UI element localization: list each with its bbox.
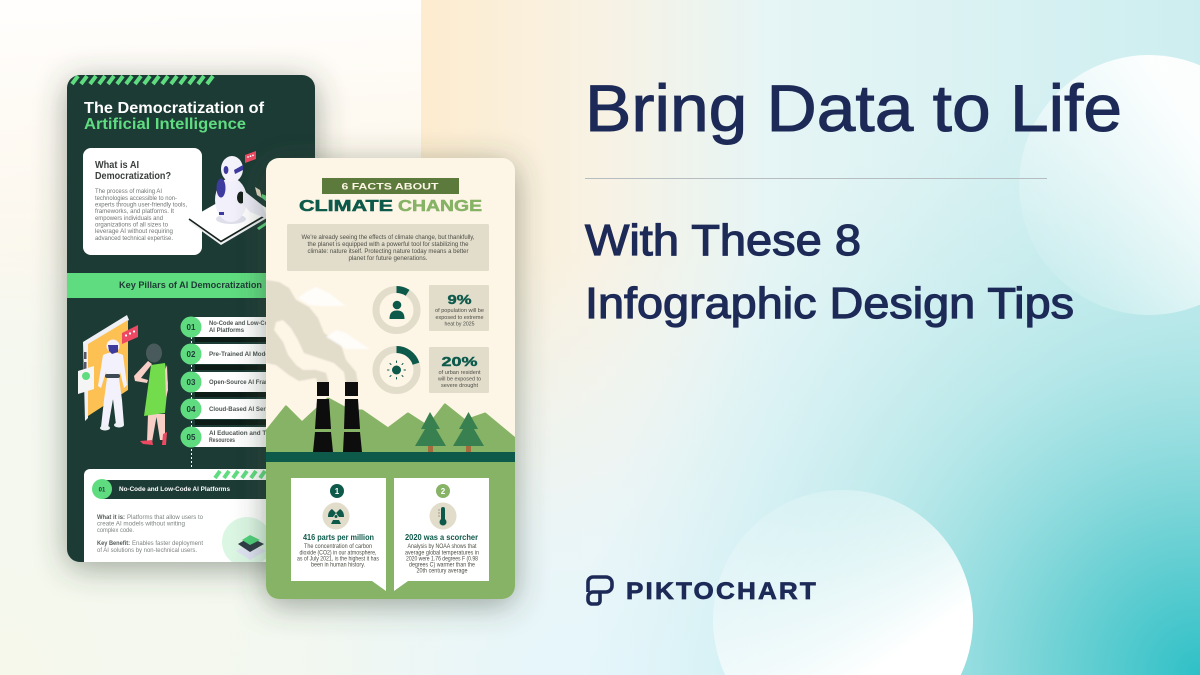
pillars list: No-Code and Low-Code <box>209 321 276 327</box>
key pillars band <box>67 273 266 298</box>
pillars list: 03 <box>187 378 196 387</box>
panel: AI democratization infographic <box>67 75 315 567</box>
dark ground band <box>266 452 515 462</box>
key pillars band: Key Pillars of AI Democratization <box>119 280 262 291</box>
text block: what is AI democratization: The process of making AI <box>95 189 162 195</box>
detail panel: no-code platforms: What it is: <box>97 515 125 521</box>
chart: 9% donut <box>376 290 417 330</box>
detail panel: no-code platforms: 01 <box>99 488 106 494</box>
fact card 2: 20th century average <box>416 569 468 575</box>
text block: what is AI democratization: What is AI <box>95 160 139 171</box>
fact card 1: 416 parts per million <box>303 533 374 542</box>
pillars list: Resources <box>209 438 236 444</box>
fact card 1 <box>291 478 386 591</box>
illustration: chimneys <box>313 382 362 452</box>
stat: 9%: of population will be <box>435 308 484 314</box>
title: Artificial Intelligence <box>84 116 246 133</box>
fact card 1: been in human history. <box>311 563 365 569</box>
text block: what is AI democratization: organizations of all sizes to <box>95 222 169 228</box>
stat: 20%: will be exposed to <box>437 376 481 382</box>
pillars list <box>180 316 266 448</box>
fact card 2: Analysis by NOAA shows that <box>408 544 477 550</box>
text block: what is AI democratization: frameworks, and platforms. It <box>95 209 174 215</box>
detail panel: no-code platforms <box>84 469 266 562</box>
fact card 1: The concentration of carbon <box>304 544 372 550</box>
illustration: smoke <box>266 280 358 384</box>
pillars list: 01 <box>187 323 196 332</box>
heading banner <box>322 178 459 194</box>
heading: bring data to life: Bring Data to Life <box>585 71 1122 145</box>
text block: what is AI democratization: technologies accessible to non- <box>95 196 177 202</box>
pillars list: AI Education and Training <box>209 431 287 437</box>
title: climate change: CLIMATE <box>299 198 393 215</box>
title: climate change: CHANGE <box>398 198 482 215</box>
title <box>84 100 265 133</box>
fact card 2: 2020 was a scorcher <box>405 533 478 542</box>
intro text: planet for future generations. <box>348 255 428 262</box>
text block: what is AI democratization: advanced technical expertise. <box>95 236 173 242</box>
intro text: climate: nature itself. Protecting nature today means a better <box>308 248 468 255</box>
icon: robot on phone <box>189 151 272 245</box>
ground <box>266 462 515 599</box>
illustration: clouds <box>298 287 370 349</box>
stat: 20%: 20% <box>442 354 478 369</box>
subheading: With These 8 <box>585 216 861 265</box>
stat: 20%: severe drought <box>441 383 478 389</box>
fact card 2 <box>394 478 489 591</box>
pillars list: Cloud-Based AI Services <box>209 407 282 413</box>
subheading: Infographic Design Tips <box>585 279 1074 328</box>
divider rule <box>585 178 1047 180</box>
fact card 2: degrees C) warmer than the <box>409 563 476 569</box>
illustration: trees <box>415 412 484 452</box>
title: The Democratization of <box>84 100 265 117</box>
logo: Piktochart: PIKTOCHART <box>626 578 818 605</box>
fact card 2: 2020 were 1.76 degrees F (0.98 <box>406 557 479 563</box>
stat: 9%: exposed to extreme <box>436 315 484 321</box>
heading banner: 6 FACTS ABOUT <box>342 182 439 192</box>
illustration: hills <box>266 399 515 452</box>
pillars list: 04 <box>187 405 196 414</box>
stat: 9%: heat by 2025 <box>444 322 474 328</box>
stat: 20%: of urban resident <box>438 370 481 376</box>
detail panel: no-code platforms: complex code. <box>97 528 134 534</box>
detail panel: no-code platforms: create AI models without writing <box>97 522 185 528</box>
text block: what is AI democratization: Democratization? <box>95 171 171 182</box>
illustration: robot and woman <box>78 315 168 445</box>
pillars list: 05 <box>187 433 196 442</box>
intro text <box>287 224 489 271</box>
stat: 20% <box>429 347 489 393</box>
fact card 1: dioxide (CO2) in our atmosphere, <box>300 550 377 556</box>
top stripes <box>72 76 213 84</box>
fact card 1: 1 <box>335 487 340 496</box>
text block: what is AI democratization: empowers individuals and <box>95 216 163 222</box>
stat: 9% <box>429 285 489 331</box>
chart: 20% donut <box>376 350 417 390</box>
dotted connector <box>191 337 192 467</box>
pillars list: 02 <box>187 350 196 359</box>
text block: what is AI democratization: leverage AI without requiring <box>95 229 173 235</box>
panel: climate change infographic <box>266 158 515 599</box>
fact card 1: as of July 2021, is the highest it has <box>297 557 379 563</box>
text block: what is AI democratization <box>83 148 202 255</box>
detail panel: no-code platforms: Key Benefit: <box>97 541 130 547</box>
detail panel: no-code platforms: of AI solutions by non-technical users. <box>97 548 197 554</box>
subheading <box>585 216 1074 328</box>
title: climate change <box>300 200 482 212</box>
detail panel: no-code platforms: No-Code and Low-Code AI Platforms <box>119 486 230 493</box>
detail panel: no-code platforms: Platforms that allow users to <box>127 515 204 521</box>
pillars list: AI Platforms <box>209 328 245 334</box>
fact card 2: 2 <box>441 487 446 496</box>
pillars list: Open-Source AI Frameworks <box>209 380 292 386</box>
detail panel: no-code platforms: Enables faster deployment <box>132 541 203 547</box>
intro text: the planet is equipped with a powerful tool for stabilizing the <box>308 241 469 248</box>
pillars list: Pre-Trained AI Models <box>209 352 275 358</box>
text block: what is AI democratization: experts through user-friendly tools, <box>95 202 187 208</box>
fact card 2: average global temperatures in <box>405 550 479 556</box>
stat: 9%: 9% <box>448 292 472 307</box>
intro text: We're already seeing the effects of climate change, but thankfully, <box>302 234 475 241</box>
